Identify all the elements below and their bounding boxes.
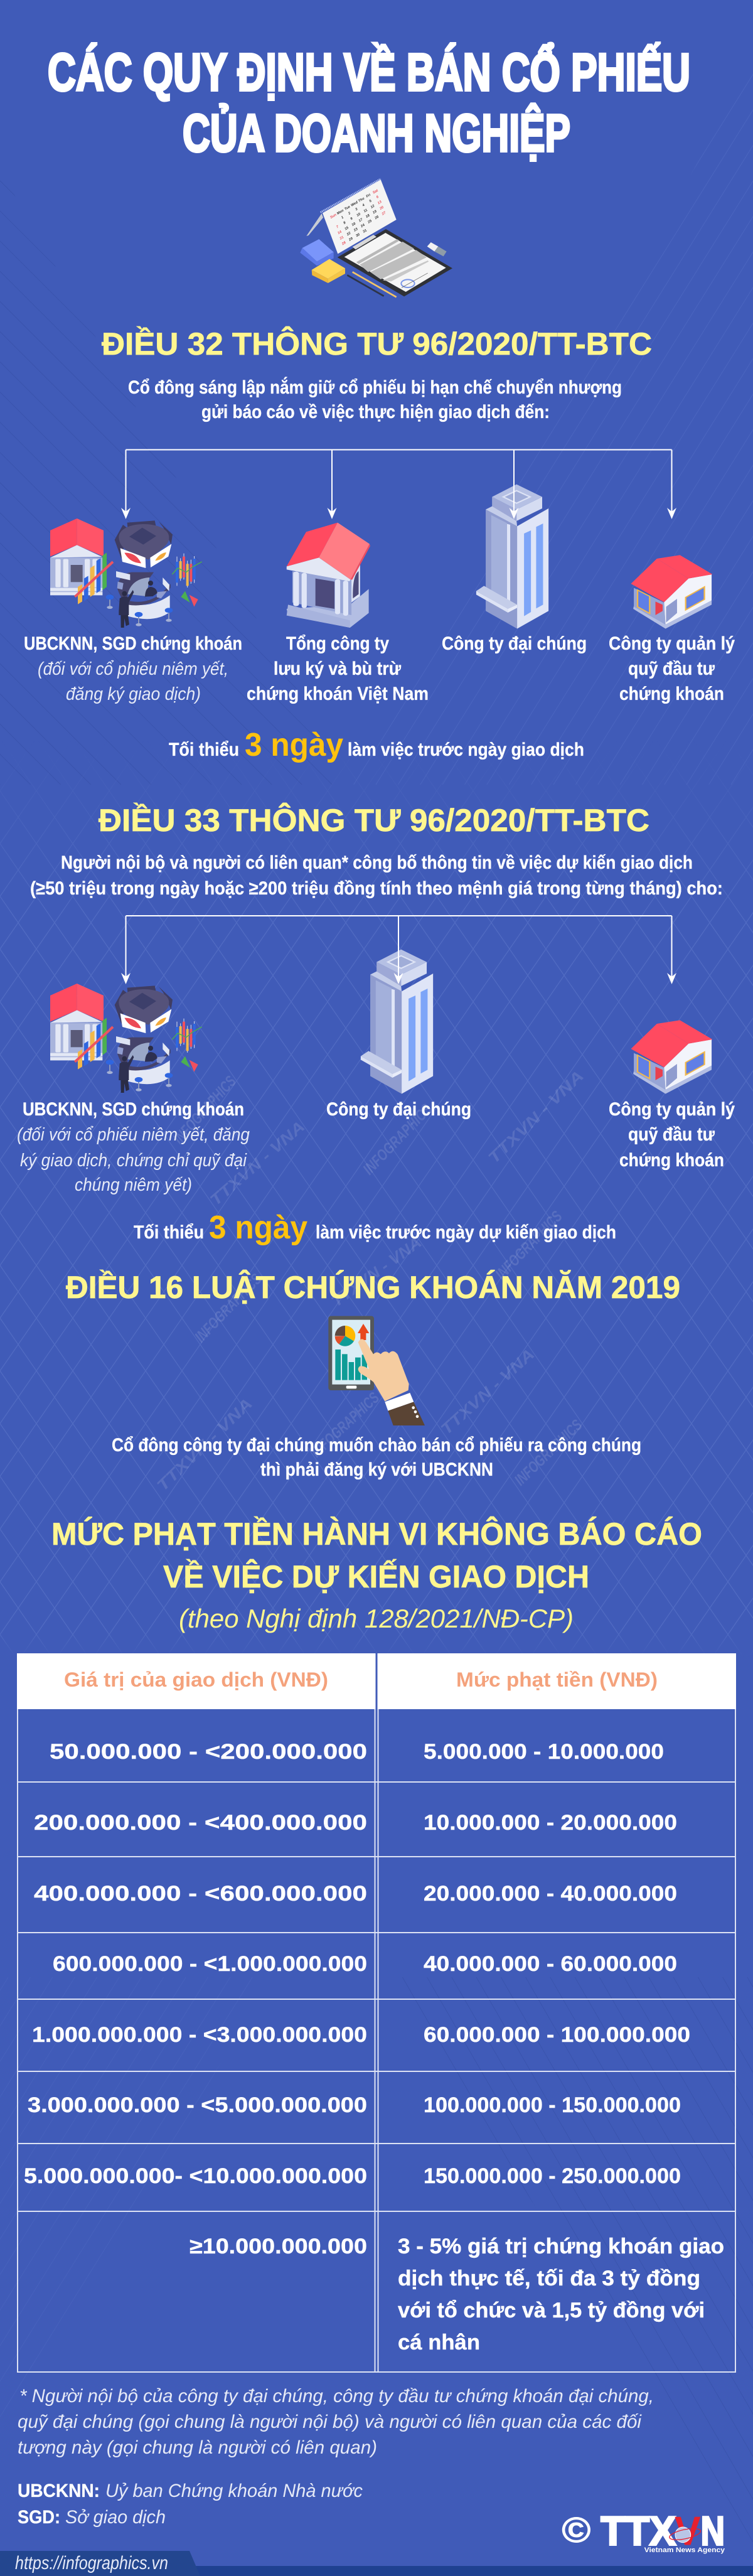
icon: calendar and documents: 13 bbox=[377, 200, 382, 205]
label: Công ty quản lý: chứng khoán bbox=[619, 1150, 724, 1171]
icon: calendar and documents bbox=[300, 179, 452, 297]
icon: calendar and documents: 30 bbox=[356, 233, 360, 239]
icon: phone and hand bbox=[328, 1316, 425, 1425]
icon: calendar and documents: Sat bbox=[373, 189, 378, 195]
label: UBCKNN, SGD: UBCKNN, SGD chứng khoán bbox=[24, 633, 242, 654]
deadline note: làm việc trước ngày giao dịch bbox=[348, 739, 584, 760]
logo: TTXVN bbox=[562, 2508, 725, 2554]
label: UBCKNN, SGD: (đối với cổ phiếu niêm yết, đăng bbox=[17, 1125, 250, 1145]
row 3: 400.000.000 - <600.000.000 bbox=[34, 1882, 367, 1906]
label: UBCKNN, SGD: (đối với cổ phiếu niêm yết, bbox=[38, 659, 228, 679]
icon: calendar and documents: 20 bbox=[380, 205, 384, 211]
icon: calendar and documents: 29 bbox=[348, 237, 353, 242]
row 3: 20.000.000 - 40.000.000 bbox=[424, 1882, 677, 1906]
icon: calendar and documents: 26 bbox=[375, 215, 379, 220]
row 8: dịch thực tế, tối đa 3 tỷ đồng bbox=[398, 2267, 700, 2290]
label: UBCKNN, SGD: ký giao dịch, chứng chỉ quỹ đại bbox=[20, 1151, 247, 1171]
intro text bbox=[128, 377, 622, 422]
row 4: 40.000.000 - 60.000.000 bbox=[424, 1952, 677, 1976]
label: Tổng công ty bbox=[247, 633, 429, 704]
label: Công ty quản lý: quỹ đầu tư bbox=[628, 658, 715, 679]
abbreviations: UBCKNN: bbox=[18, 2481, 100, 2501]
row 1 bbox=[50, 1740, 664, 1764]
icon: calendar and documents: 25 bbox=[368, 219, 372, 225]
icon: calendar and documents: 10 bbox=[356, 212, 361, 218]
row 6 bbox=[28, 2093, 681, 2117]
intro text: Cổ đông công ty đại chúng muốn chào bán cổ phiếu ra công chúng bbox=[112, 1435, 641, 1456]
icon: house bbox=[631, 555, 712, 629]
heading: Điều 32: ĐIỀU 32 THÔNG TƯ 96/2020/TT-BTC bbox=[102, 326, 652, 362]
deadline note: làm việc trước ngày dự kiến giao dịch bbox=[316, 1222, 616, 1243]
watermarks: TTXVN - VNA bbox=[154, 1395, 256, 1495]
icon: bank and stock exchange bbox=[50, 984, 202, 1093]
label: UBCKNN, SGD: đăng ký giao dịch) bbox=[66, 684, 201, 704]
label: UBCKNN, SGD: UBCKNN, SGD chứng khoán bbox=[23, 1099, 244, 1120]
row 7: 150.000.000 - 250.000.000 bbox=[424, 2164, 681, 2188]
icon: calendar and documents: 5 bbox=[369, 199, 372, 204]
heading: penalties: (theo Nghị định 128/2021/NĐ-CP) bbox=[179, 1604, 574, 1633]
arrows to four recipients bbox=[121, 449, 676, 519]
row 5: 60.000.000 - 100.000.000 bbox=[424, 2023, 690, 2047]
watermarks: TTXVN - VNA bbox=[328, 1233, 425, 1311]
icon: tower bbox=[476, 485, 548, 629]
watermarks: INFOGRAPHICS bbox=[511, 1416, 586, 1489]
label: Công ty quản lý: Công ty quản lý bbox=[609, 633, 735, 654]
icon: calendar and documents: 21 bbox=[339, 235, 344, 241]
icon: calendar and documents: 22 bbox=[346, 232, 351, 237]
footer band: https://infographics.vn bbox=[15, 2553, 168, 2573]
footnote: tượng này (gọi chung là người có liên quan) bbox=[18, 2437, 377, 2458]
icon: calendar and documents: 7 bbox=[336, 225, 339, 230]
row 3 bbox=[34, 1882, 677, 1906]
icon: calendar and documents: 9 bbox=[350, 217, 353, 222]
icon: calendar and documents: Fri bbox=[366, 193, 371, 199]
icon: calendar and documents: 16 bbox=[351, 222, 356, 227]
icon: calendar and documents: 24 bbox=[360, 223, 366, 228]
icon: tower bbox=[361, 950, 433, 1094]
row 5 bbox=[32, 2023, 690, 2047]
label: Công ty quản lý bbox=[609, 1099, 735, 1171]
deadline note bbox=[134, 1210, 616, 1246]
row 5: 1.000.000.000 - <3.000.000.000 bbox=[32, 2023, 367, 2047]
footnote: * Người nội bộ của công ty đại chúng, công ty đầu tư chứng khoán đại chúng, bbox=[19, 2386, 654, 2407]
section: Điều 16 bbox=[66, 1270, 680, 1480]
row 8: cá nhân bbox=[398, 2331, 480, 2354]
icon: calendar and documents: Sun bbox=[330, 213, 337, 220]
abbreviations bbox=[18, 2481, 363, 2528]
icon: calendar and documents: 15 bbox=[344, 226, 349, 232]
abbreviations: Sở giao dịch bbox=[65, 2507, 166, 2528]
icon: calendar and documents: 17 bbox=[358, 218, 363, 223]
watermarks: INFOGRAPHICS bbox=[307, 1389, 383, 1461]
watermarks bbox=[154, 1067, 587, 1495]
icon: calendar and documents: 19 bbox=[372, 210, 377, 215]
row 1: 5.000.000 - 10.000.000 bbox=[424, 1740, 664, 1764]
icon: calendar and documents: 31 bbox=[363, 228, 367, 234]
watermarks: TTXVN - VNA bbox=[437, 1346, 538, 1438]
icon: house bbox=[631, 1020, 712, 1094]
icon: calendar and documents: Tue bbox=[344, 205, 351, 212]
intro text bbox=[112, 1435, 641, 1480]
watermarks: INFOGRAPHICS bbox=[170, 1073, 240, 1147]
label: UBCKNN, SGD: chúng niêm yết) bbox=[75, 1175, 192, 1195]
heading: penalties: MỨC PHẠT TIỀN HÀNH VI KHÔNG BÁO CÁO bbox=[51, 1516, 702, 1552]
icon: calendar and documents: 3 bbox=[355, 207, 358, 212]
heading: Điều 16: ĐIỀU 16 LUẬT CHỨNG KHOÁN NĂM 2019 bbox=[66, 1270, 680, 1305]
intro text bbox=[30, 852, 723, 899]
logo: TTXVN: © bbox=[562, 2511, 590, 2550]
icon: calendar and documents: 18 bbox=[365, 213, 370, 219]
intro text: Cổ đông sáng lập nắm giữ cổ phiếu bị hạn chế chuyển nhượng bbox=[128, 377, 622, 398]
logo: TTXVN: Vietnam News Agency bbox=[644, 2546, 725, 2554]
label: Công ty quản lý: chứng khoán bbox=[619, 684, 724, 704]
footnote bbox=[18, 2386, 654, 2458]
icon: calendar and documents: 11 bbox=[363, 208, 368, 213]
table header bbox=[17, 1653, 736, 1709]
row 6: 3.000.000.000 - <5.000.000.000 bbox=[28, 2093, 367, 2117]
row 8: với tổ chức và 1,5 tỷ đồng với bbox=[398, 2299, 705, 2322]
label: Tổng công ty: chứng khoán Việt Nam bbox=[247, 684, 429, 704]
heading: penalties: VỀ VIỆC DỰ KIẾN GIAO DỊCH bbox=[163, 1559, 589, 1594]
table header: Giá trị của giao dịch (VNĐ) bbox=[64, 1668, 328, 1691]
table header: Mức phạt tiền (VNĐ) bbox=[456, 1668, 658, 1691]
label: Công ty quản lý bbox=[609, 633, 735, 704]
row 8: ≥10.000.000.000 bbox=[190, 2235, 367, 2258]
row 8 bbox=[190, 2235, 724, 2354]
logo: TTXVN: N bbox=[701, 2508, 725, 2553]
label: Công ty đại chúng: Công ty đại chúng bbox=[326, 1099, 471, 1120]
icon: bank and stock exchange bbox=[50, 518, 202, 628]
abbreviations: Uỷ ban Chứng khoán Nhà nước bbox=[105, 2481, 363, 2501]
row 4 bbox=[53, 1952, 677, 1976]
icon: calendar and documents: 14 bbox=[338, 230, 343, 235]
row 2: 200.000.000 - <400.000.000 bbox=[34, 1811, 367, 1835]
label: Công ty quản lý: quỹ đầu tư bbox=[628, 1124, 715, 1145]
icon: calendar and documents: Thu bbox=[358, 196, 365, 203]
section: Điều 33 bbox=[17, 802, 735, 1246]
watermarks: INFOGRAPHICS bbox=[492, 1208, 566, 1283]
title bbox=[48, 43, 690, 163]
label: Tổng công ty: Tổng công ty bbox=[286, 633, 389, 654]
heading: penalties bbox=[51, 1516, 702, 1633]
icon: calendar and documents: 2 bbox=[348, 212, 351, 216]
row 6: 100.000.000 - 150.000.000 bbox=[424, 2093, 681, 2117]
row 1: 50.000.000 - <200.000.000 bbox=[50, 1740, 367, 1764]
icon: calendar and documents: 6 bbox=[376, 195, 379, 200]
label: Tổng công ty: lưu ký và bù trừ bbox=[274, 658, 401, 679]
deadline note: Tối thiểu bbox=[169, 739, 239, 760]
logo: TTXVN: TTX bbox=[601, 2508, 676, 2553]
label: Công ty quản lý: Công ty quản lý bbox=[609, 1099, 735, 1120]
row 4: 600.000.000 - <1.000.000.000 bbox=[53, 1952, 367, 1976]
intro text: gửi báo cáo về việc thực hiện giao dịch đến: bbox=[201, 402, 550, 422]
icon: calendar and documents: Mon bbox=[336, 208, 344, 216]
icon: calendar and documents: 4 bbox=[362, 203, 366, 208]
arrows to three recipients bbox=[121, 916, 676, 984]
row 2: 10.000.000 - 20.000.000 bbox=[424, 1811, 677, 1835]
logo: TTXVN: V bbox=[675, 2508, 701, 2553]
abbreviations: SGD: bbox=[18, 2507, 60, 2528]
icon: depository bank bbox=[287, 523, 370, 628]
label: UBCKNN, SGD bbox=[17, 1099, 250, 1195]
icon: calendar and documents: 27 bbox=[382, 211, 387, 217]
watermarks: INFOGRAPHICS bbox=[360, 1100, 435, 1178]
footnote: quỹ đại chúng (gọi chung là người nội bộ) và người có liên quan của các đối bbox=[18, 2412, 642, 2432]
watermarks: TTXVN - VNA bbox=[485, 1067, 587, 1167]
intro text: thì phải đăng ký với UBCKNN bbox=[260, 1459, 493, 1480]
title: CỦA DOANH NGHIỆP bbox=[183, 104, 570, 163]
icon: calendar and documents: 8 bbox=[343, 221, 346, 225]
footer band bbox=[0, 2551, 753, 2576]
deadline note bbox=[169, 727, 584, 763]
icon: calendar and documents: 12 bbox=[370, 204, 375, 210]
watermarks: INFOGRAPHICS bbox=[191, 1270, 265, 1346]
icon: calendar and documents: 23 bbox=[353, 227, 358, 233]
deadline note: 3 ngày bbox=[209, 1210, 307, 1246]
deadline note: Tối thiểu bbox=[134, 1222, 204, 1243]
row 7: 5.000.000.000- <10.000.000.000 bbox=[24, 2164, 367, 2188]
icon: calendar and documents: Wed bbox=[351, 200, 358, 208]
label: Công ty đại chúng: Công ty đại chúng bbox=[442, 633, 587, 654]
heading: Điều 33: ĐIỀU 33 THÔNG TƯ 96/2020/TT-BTC bbox=[99, 802, 649, 838]
row 2 bbox=[34, 1811, 677, 1835]
deadline note: 3 ngày bbox=[245, 727, 343, 763]
watermarks: TTXVN - VNA bbox=[207, 1118, 308, 1210]
icon: calendar and documents: 28 bbox=[341, 241, 346, 247]
table: penalties bbox=[17, 1653, 736, 2372]
section: Điều 32 bbox=[24, 326, 735, 763]
row 8: 3 - 5% giá trị chứng khoán giao bbox=[398, 2235, 724, 2258]
row 7 bbox=[24, 2164, 681, 2188]
icon: calendar and documents: 1 bbox=[341, 215, 344, 220]
label: UBCKNN, SGD bbox=[24, 633, 242, 704]
